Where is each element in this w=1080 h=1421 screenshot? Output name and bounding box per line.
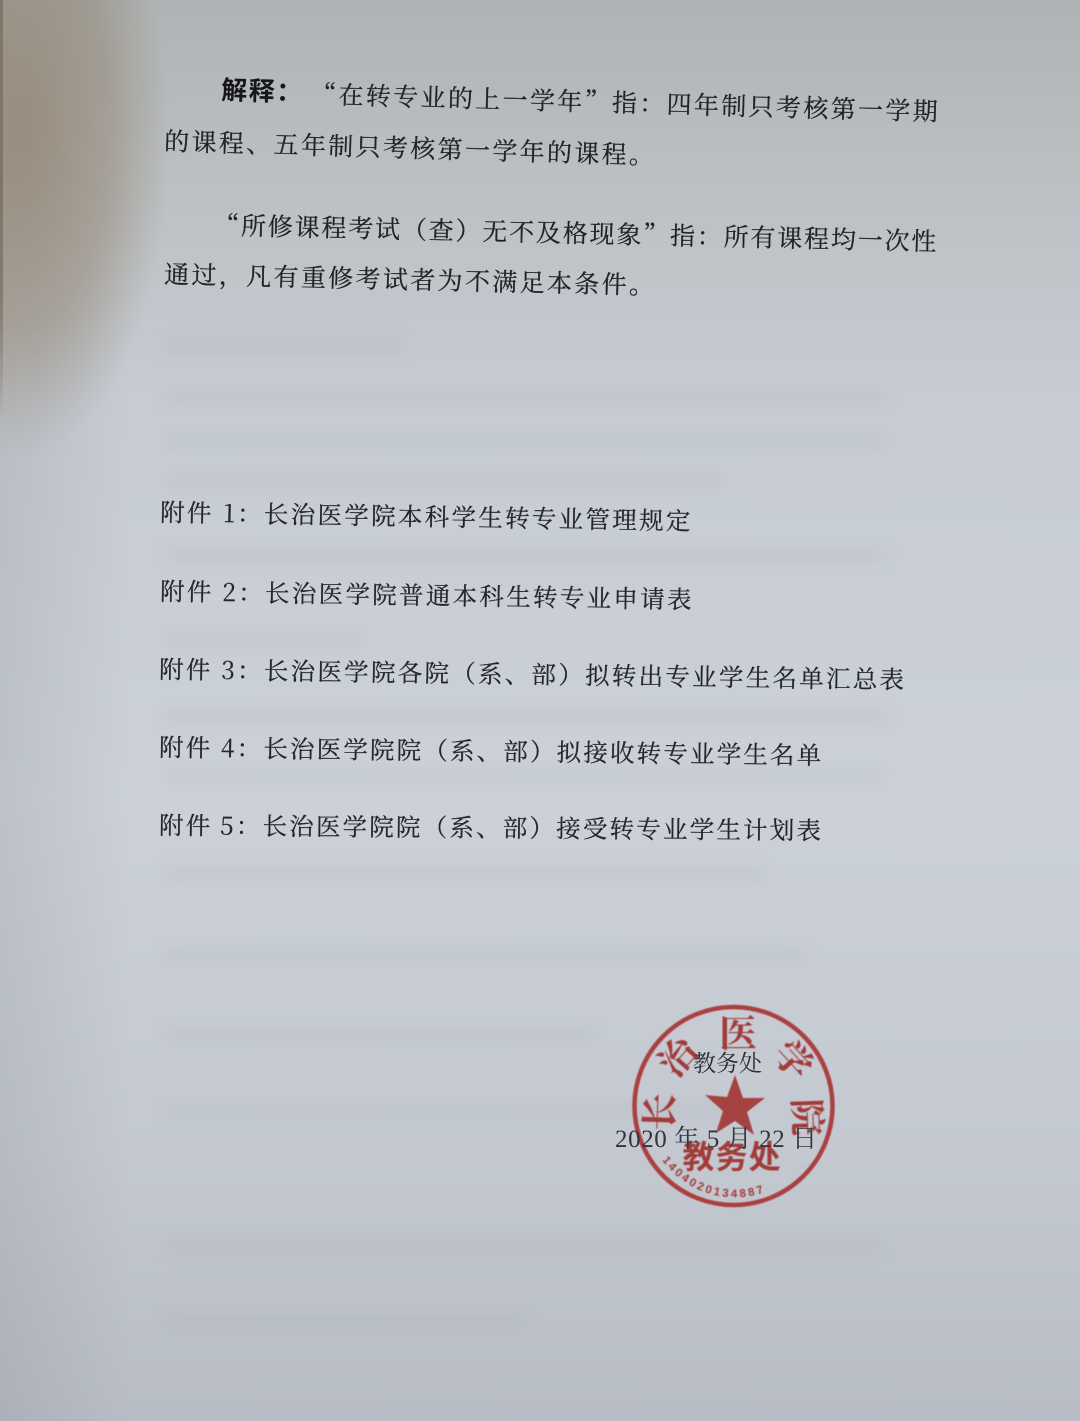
date: 2020 年 5 月 22 日 <box>615 1125 818 1153</box>
seal school name: 学 <box>763 1026 828 1090</box>
seal school name: 院 <box>782 1097 838 1136</box>
issuing office: 教务处 <box>693 1045 762 1078</box>
line: first year definition continued: 的课程、五年制只考核第一学年的课程。 <box>164 122 657 172</box>
seal school name <box>629 1003 838 1136</box>
seal ring <box>634 1007 832 1205</box>
list: attachments <box>159 494 907 847</box>
seal star <box>705 1075 765 1135</box>
attachment 3: 附件 3：长治医学院各院（系、部）拟转出专业学生名单汇总表 <box>159 651 907 696</box>
attachment 5: 附件 5：长治医学院院（系、部）接受转专业学生计划表 <box>159 807 823 847</box>
seal serial number: 1404020134887 <box>662 1156 762 1198</box>
line: no failed courses definition: “所修课程考试（查）无不及格现象”指：所有课程均一次性 <box>214 206 939 258</box>
attachment 1: 附件 1：长治医学院本科学生转专业管理规定 <box>160 494 693 538</box>
seal school name: 长 <box>629 1092 685 1131</box>
text block: explanation paragraph one <box>164 70 941 172</box>
heading: 解释: 解释： <box>221 70 304 109</box>
text block: explanation paragraph two <box>164 206 939 302</box>
line: no failed courses definition continued: 通过，凡有重修考试者为不满足本条件。 <box>164 255 657 302</box>
seal school name: 治 <box>643 1021 710 1087</box>
attachment 2: 附件 2：长治医学院普通本科生转专业申请表 <box>160 573 694 616</box>
attachment 4: 附件 4：长治医学院院（系、部）拟接收转专业学生名单 <box>159 729 824 772</box>
seal department: 教务处 <box>682 1132 782 1178</box>
line: first year definition: “在转专业的上一学年”指：四年制只考核第一学期 <box>311 75 941 129</box>
seal school name: 医 <box>719 1003 757 1058</box>
signature: issuing office and date <box>615 1045 818 1153</box>
icon: red official seal <box>629 1003 838 1208</box>
